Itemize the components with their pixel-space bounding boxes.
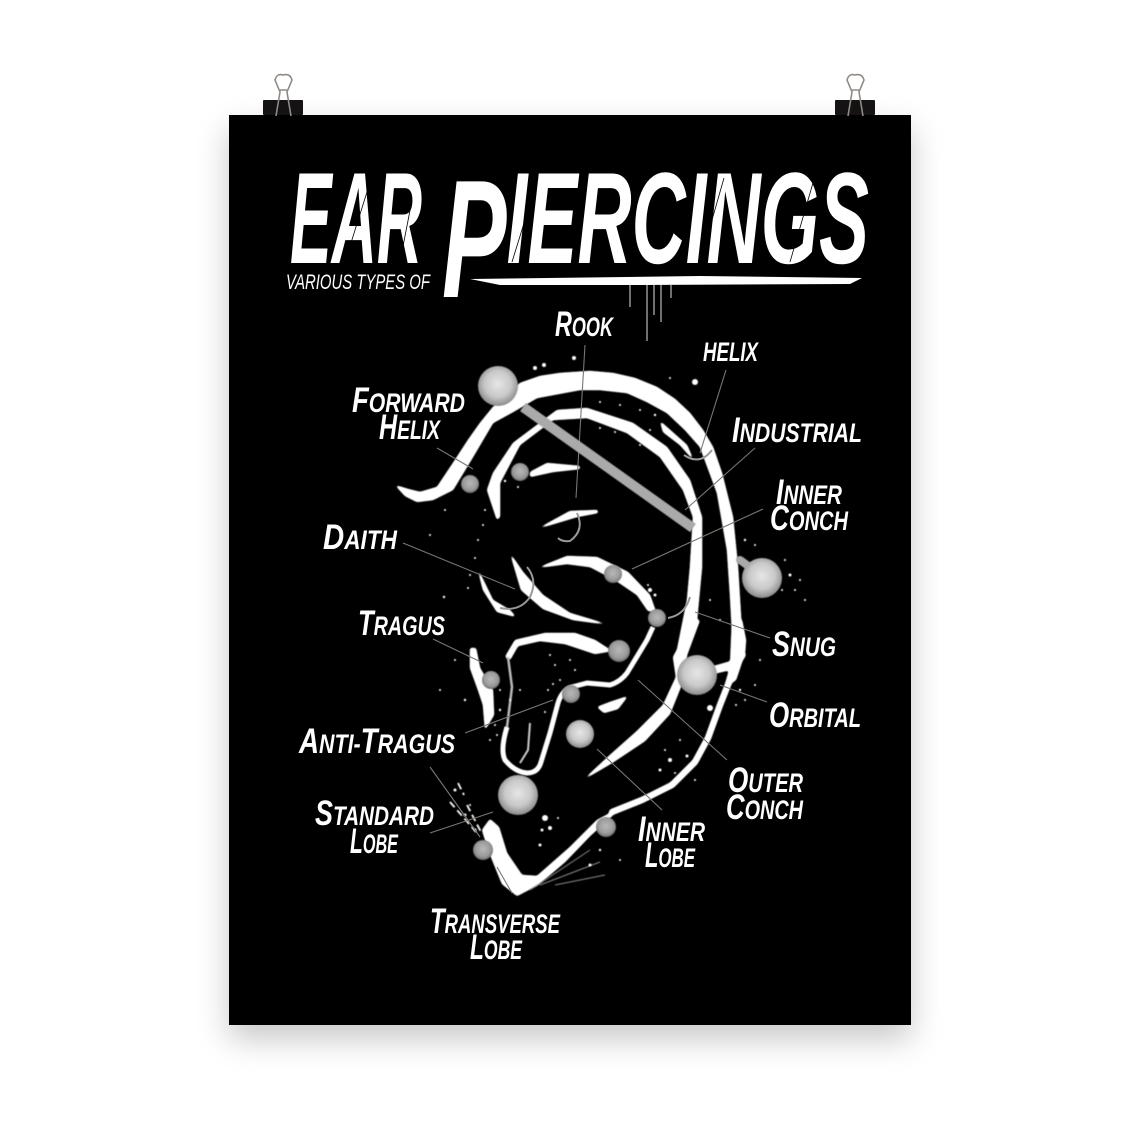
ear details in thin strokes <box>429 356 806 890</box>
label: Standard Lobe: STANDARD <box>315 794 434 833</box>
label: Inner Conch <box>770 473 848 538</box>
label: Standard Lobe: LOBE <box>350 822 399 861</box>
ear: scapha splash stroke <box>660 421 704 484</box>
ear: spray near earlobe <box>530 850 605 890</box>
leader: industrial <box>685 448 755 510</box>
leader: standard lobe <box>430 812 493 833</box>
ear: concha upper bar <box>505 633 612 660</box>
label: Daith: DAITH <box>323 518 397 557</box>
barbell top ball <box>478 366 518 406</box>
ear: daith fold <box>477 567 516 617</box>
title dry-brush streaks <box>345 176 815 262</box>
ring: helix <box>684 450 712 459</box>
label: Forward Helix: FORWARD <box>352 381 465 420</box>
label: Forward Helix: HELIX <box>379 408 441 447</box>
poster background <box>229 115 911 1025</box>
label: Rook: ROOK <box>555 305 615 344</box>
label: Transverse Lobe: TRANSVERSE <box>430 902 561 941</box>
leader: inner lobe <box>597 749 662 810</box>
ear: crus stroke <box>510 553 610 625</box>
leader: tragus <box>433 639 483 663</box>
label: Inner Lobe: LOBE <box>645 836 696 875</box>
leader: transverse lobe <box>430 767 512 893</box>
leader: inner conch <box>632 509 763 569</box>
icon: right binder clip <box>835 75 875 116</box>
bead: forward helix outer <box>461 475 479 493</box>
ear: upper short stroke <box>530 463 580 477</box>
bead: inner lobe upper <box>566 720 594 748</box>
label: Inner Lobe <box>638 810 705 875</box>
label: Transverse Lobe: LOBE <box>470 928 523 967</box>
title word: Piercings: P <box>442 145 507 333</box>
ear: tragus stroke <box>470 648 494 730</box>
piercing rings <box>500 450 712 618</box>
label: Inner Conch: INNER <box>776 473 842 512</box>
ring: snug <box>668 597 690 618</box>
bead: forward helix inner <box>511 463 529 481</box>
label: Forward Helix <box>352 381 465 447</box>
title word: Piercings: IERCINGS <box>507 145 869 291</box>
ear: dashes above lobe <box>450 783 481 833</box>
label: Tragus: TRAGUS <box>358 604 445 643</box>
bead: tragus <box>482 671 500 689</box>
bead: outer conch <box>608 640 630 662</box>
label: Outer Conch: CONCH <box>726 788 803 827</box>
bead: orbital <box>677 655 717 695</box>
ring: daith <box>500 567 533 609</box>
ear: antihelix lower branch <box>583 620 700 780</box>
label: Anti-Tragus: ANTI-TRAGUS <box>298 722 455 761</box>
leader lines <box>403 345 770 893</box>
bead: inner lobe lower <box>596 817 616 837</box>
title: EAR <box>290 145 422 291</box>
bead: transverse lobe <box>473 840 493 860</box>
ear: paint splatter <box>429 356 806 866</box>
bead: standard lobe <box>498 775 538 815</box>
leader: forward helix <box>437 448 473 469</box>
label: Orbital: ORBITAL <box>769 696 861 735</box>
leader: daith <box>403 543 515 589</box>
ear: earlobe stroke <box>482 810 616 896</box>
bead: snug <box>648 609 666 627</box>
label: Snug: SNUG <box>772 625 836 664</box>
ear: antihelix arc <box>487 408 702 650</box>
barbell right ball <box>742 558 782 598</box>
ear illustration <box>395 371 746 896</box>
industrial barbell <box>478 366 782 598</box>
ear: concha upper stroke <box>537 556 656 612</box>
ear: lobe loop <box>503 627 653 773</box>
leader: anti-tragus <box>465 700 553 733</box>
bead: anti-tragus <box>562 685 580 703</box>
ear: small crescent <box>597 696 628 713</box>
piercing beads <box>461 463 717 860</box>
label: Inner Conch: CONCH <box>770 499 848 538</box>
ear: lower helix descending stroke <box>612 672 733 812</box>
leader: orbital <box>720 685 767 702</box>
label: Helix: HELIX <box>703 337 759 367</box>
title <box>286 145 869 341</box>
label: Inner Lobe: INNER <box>638 810 705 849</box>
leader: rook <box>576 345 585 498</box>
icon: left binder clip <box>263 75 303 116</box>
ear: lower helix upper band <box>724 620 746 688</box>
ear: canal stroke <box>507 657 512 727</box>
leader: outer conch <box>638 680 727 760</box>
label: Transverse Lobe <box>430 902 561 967</box>
ear: inner antitragus line <box>520 723 530 763</box>
ring: rook <box>558 513 580 541</box>
subtitle: VARIOUS TYPES OF <box>286 271 431 294</box>
label: Outer Conch <box>726 761 803 827</box>
leader: snug <box>695 612 770 638</box>
title underline with drips <box>470 276 862 341</box>
label: Standard Lobe <box>315 794 434 861</box>
bead: inner conch <box>604 565 622 583</box>
ear: orbital ring link <box>700 650 746 676</box>
ear: outer helix stroke <box>395 371 743 650</box>
leader: helix <box>700 370 726 453</box>
label: Industrial: INDUSTRIAL <box>732 411 862 450</box>
ear: rook stroke <box>537 510 598 529</box>
label: Outer Conch: OUTER <box>728 761 803 800</box>
barbell bar <box>523 407 693 528</box>
barbell stub <box>740 560 758 573</box>
